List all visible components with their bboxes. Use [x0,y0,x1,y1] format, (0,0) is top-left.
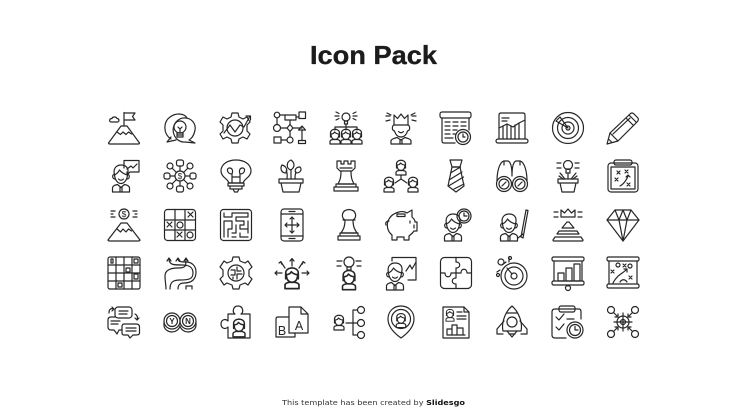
icon: A and B files: B [278,324,286,338]
icon: flowchart [274,112,306,144]
icon: person with crown [386,113,416,144]
icon: tactics clipboard [608,160,638,192]
icon: yes no coins: N [185,317,191,326]
icon: rocket [497,306,527,337]
icon: stopwatch [496,256,527,289]
icon: person with bulb [337,257,361,290]
icon: puzzle [440,258,472,288]
icon: maze [220,210,252,240]
icon: chess board [108,257,140,289]
icon: mountain with dollar [108,209,140,241]
icon: person with growth board [386,258,416,290]
icon: teacher with pointer [500,210,528,241]
footer credit: This template has been created by Slidesgo [281,398,465,407]
icon: person with chart bubble [112,160,139,192]
icon: converging paths with arrows [165,258,196,289]
title: Icon Pack [310,40,438,70]
icon: pencil [607,113,638,144]
icon: target with arrows [608,306,638,338]
icon: three people with bulb [330,112,362,144]
icon: person with clock [444,209,471,241]
icon: puzzle piece with person [221,306,250,338]
icon: potted plant [279,160,303,192]
icon grid [108,112,639,338]
icon: pyramid with crown [553,209,583,241]
icon: checklist with clock [552,306,583,338]
icon: A and B files [276,307,308,338]
icon: location pin with person [388,306,414,338]
icon: gear with chart line [220,113,250,143]
icon: mountain with dollar: $ [122,209,127,219]
icon: tactics map [607,257,639,288]
icon: diamond [607,210,639,241]
icon: phone with arrows [281,209,303,241]
icon: yes no coins: Y [169,317,175,326]
icon: gear with maze [220,257,252,289]
icon: person with org tree [334,306,364,338]
icon: chat bubbles [108,307,140,338]
icon: A and B files: A [295,319,304,333]
icon: calendar with clock [440,112,471,144]
icon: binoculars [496,161,528,192]
icon: presentation board [552,257,584,290]
icon: light bulb [221,160,251,192]
icon: dollar network [164,160,196,192]
icon: resume document [443,307,469,338]
icon: bulb in pot [557,160,579,192]
icon: mountain with flag [108,112,140,144]
icon: connected people [384,160,418,192]
icon: yes no coins [164,313,196,332]
icon: chess pawn [338,210,360,240]
icon: laptop with chart [496,113,528,143]
icon: speech bubbles with bulb [165,114,195,143]
icon: radar target [552,112,584,144]
icon: necktie [448,160,464,192]
icon: person with radiating arrows [275,258,309,289]
icon: tic tac toe [164,210,196,240]
icon: piggy bank [386,210,417,240]
icon: chess rook [334,161,358,191]
icon: dollar network: $ [178,172,183,181]
